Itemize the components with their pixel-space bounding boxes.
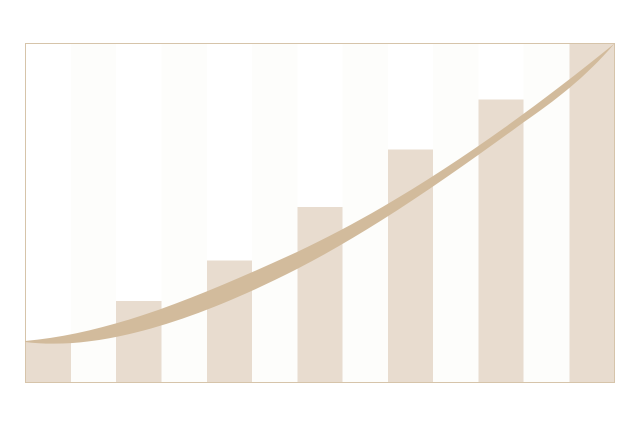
pale background bands — [71, 44, 570, 382]
bars — [25, 44, 614, 382]
growth curve — [25, 44, 614, 344]
chart frame — [26, 44, 614, 382]
